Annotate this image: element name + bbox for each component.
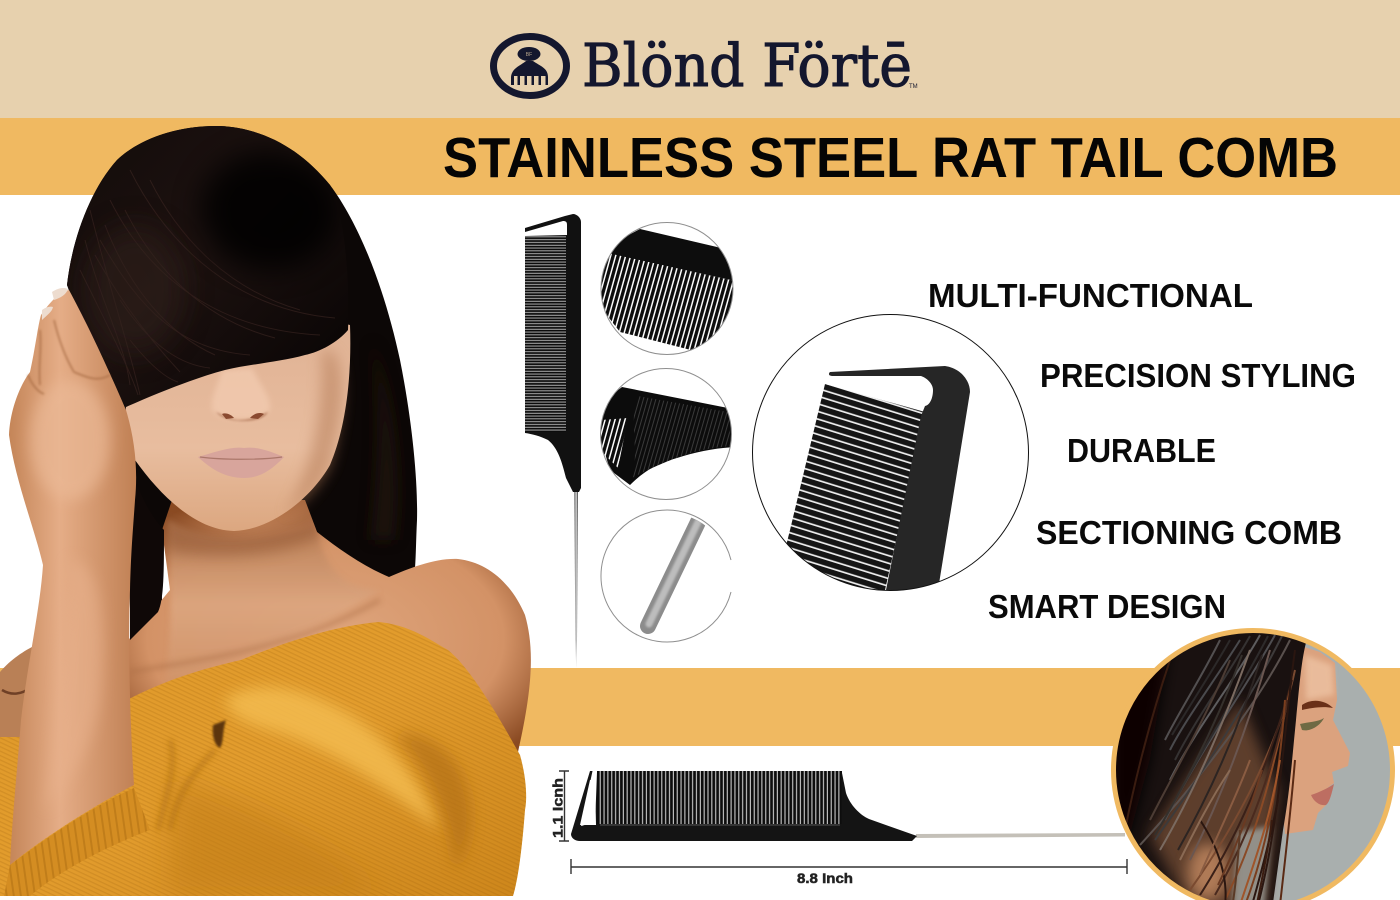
wrist highlight xyxy=(72,570,104,752)
sweater cuff ribbing xyxy=(4,788,150,896)
label: 1.1 Icnh xyxy=(550,778,566,838)
detail circle: handle close-up xyxy=(595,368,735,500)
background xyxy=(1110,630,1400,900)
title: STAINLESS STEEL RAT TAIL COMB xyxy=(443,126,1338,190)
trademark: TM xyxy=(909,84,918,90)
small teeth xyxy=(600,418,628,468)
ribbing xyxy=(632,396,731,478)
sweater xyxy=(0,622,526,896)
dimension: length label xyxy=(571,859,1127,886)
back hair xyxy=(67,126,417,640)
fringe shading clipped to hair xyxy=(80,150,340,395)
neck shading clipped to skin xyxy=(139,508,380,672)
circle outline xyxy=(752,314,1028,590)
comb pin xyxy=(574,492,578,668)
portrait ring xyxy=(1114,630,1392,900)
dimension: width label xyxy=(550,771,569,841)
back hair left of neck xyxy=(130,528,164,640)
cuff lines xyxy=(4,788,150,896)
left shoulder crease xyxy=(2,689,25,695)
sweater crease xyxy=(213,720,226,748)
skin through hair xyxy=(1188,844,1228,900)
hair strands xyxy=(1125,635,1295,900)
comb body xyxy=(525,214,581,492)
teeth xyxy=(597,771,842,824)
comb teeth xyxy=(525,236,566,432)
comb body xyxy=(571,771,917,841)
photo: woman with hair over eyes xyxy=(0,126,531,896)
forehead light xyxy=(1305,655,1334,700)
comb solid top xyxy=(611,229,732,280)
hair black left xyxy=(1112,640,1170,840)
band: lower orange strip xyxy=(0,668,1400,746)
steel tail xyxy=(916,833,1125,838)
hand back highlight xyxy=(30,380,110,500)
face right shadow xyxy=(285,350,342,515)
band: orange title strip xyxy=(0,118,1400,195)
circle outline xyxy=(600,368,732,500)
sweater lower shadow xyxy=(170,786,346,894)
label: 8.8 Inch xyxy=(797,871,853,886)
band: top beige header xyxy=(0,0,1400,118)
fingernail one xyxy=(52,288,68,300)
bracket xyxy=(559,771,569,841)
sweater bright fold xyxy=(224,687,440,830)
eyebrow xyxy=(1302,701,1333,710)
left shoulder xyxy=(0,647,32,737)
neck tone xyxy=(168,522,333,654)
arm and hand xyxy=(9,290,136,865)
logo wordmark: Blönd Förtē xyxy=(582,31,912,100)
pin highlight xyxy=(649,522,698,624)
feature: sectioning comb: SECTIONING COMB xyxy=(1036,514,1342,551)
fringe dark crown xyxy=(200,150,340,270)
teeth xyxy=(775,384,925,590)
fringe strands xyxy=(80,170,335,395)
sweater knit xyxy=(0,622,526,896)
icon: comb emblem: BF xyxy=(526,52,532,58)
feature: durable: DURABLE xyxy=(1067,432,1216,469)
comb: horizontal with dimensions xyxy=(571,771,1125,841)
spine xyxy=(829,366,970,590)
fringe xyxy=(67,126,348,407)
pale gown through hair xyxy=(1232,826,1272,900)
detail circle: large comb close-up xyxy=(752,314,1028,590)
photo: woman with wet hair in circle xyxy=(1110,630,1400,900)
hair brown lower xyxy=(1150,700,1278,900)
sweater right shadow xyxy=(395,734,471,870)
comb: full vertical rat tail comb xyxy=(525,214,581,668)
lips xyxy=(1311,784,1334,805)
teeth baseline xyxy=(600,824,840,826)
icon: comb emblem xyxy=(494,36,566,96)
eye xyxy=(1300,718,1324,730)
fringe glow xyxy=(92,234,178,346)
back hair sheen xyxy=(374,399,396,538)
feature: smart design: SMART DESIGN xyxy=(988,588,1226,625)
sweater left fold xyxy=(158,740,215,830)
face xyxy=(126,324,350,531)
detail circle: steel pin close-up xyxy=(601,510,731,642)
nose xyxy=(212,368,270,421)
circle outline xyxy=(601,222,733,354)
collarbone crease xyxy=(130,600,380,672)
feature: multi-functional: MULTI-FUNCTIONAL xyxy=(928,277,1253,314)
feature: precision styling: PRECISION STYLING xyxy=(1040,357,1356,394)
shoulder and neck xyxy=(120,500,531,752)
hair mass xyxy=(1112,630,1310,900)
pin shadow body xyxy=(648,522,698,626)
ribbed body xyxy=(595,387,735,485)
circle outline xyxy=(601,510,731,642)
face xyxy=(1280,645,1350,834)
comb hole xyxy=(525,221,567,236)
hole xyxy=(580,780,596,825)
close-up teeth xyxy=(602,254,732,350)
fingernail two xyxy=(42,307,53,320)
chin shadow xyxy=(160,500,322,556)
length line xyxy=(571,859,1127,874)
finger creases xyxy=(28,320,110,394)
lips xyxy=(198,448,284,478)
detail circle: teeth close-up xyxy=(600,222,734,355)
logo: Blond Forte xyxy=(494,31,918,100)
